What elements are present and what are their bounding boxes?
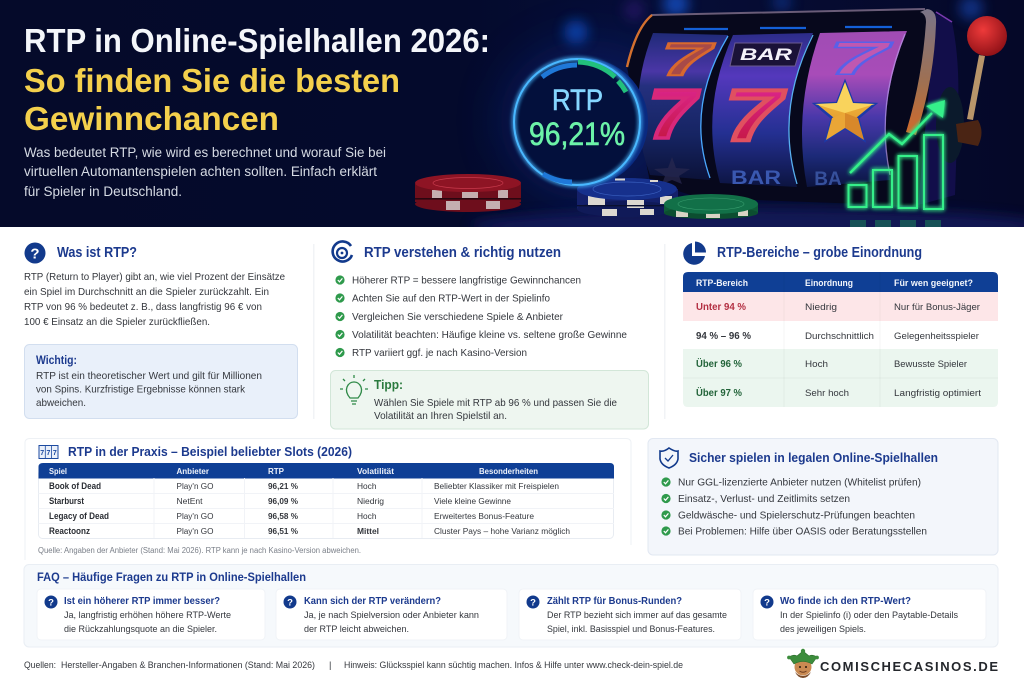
table: rtp ranges <box>683 272 998 407</box>
machine frame top and left edge <box>627 9 925 67</box>
panel: rtp verstehen <box>330 241 648 429</box>
hero background <box>0 0 1024 227</box>
panel background <box>24 564 998 647</box>
symbol: red seven left reel: 7 <box>648 75 700 153</box>
faq card 4: In der Spielinfo (i) oder den Paytable-Details <box>780 610 958 621</box>
faq card 3: Der RTP bezieht sich immer auf das gesamte <box>547 610 727 621</box>
row: book of dead <box>49 481 559 491</box>
callout: wichtig: Wichtig: <box>36 355 77 367</box>
reel 3 <box>802 31 907 187</box>
hero banner <box>0 0 1024 244</box>
row: legacy of dead: 96,58 % <box>268 511 298 521</box>
lever ball <box>967 16 1007 56</box>
panel background <box>648 438 998 555</box>
reel separator lights <box>684 27 905 184</box>
faq card 1 <box>37 589 265 640</box>
heading: Was ist RTP? <box>57 245 137 261</box>
lever <box>936 16 1007 163</box>
table header: Spiel <box>49 466 67 476</box>
symbol: bar plate <box>730 43 802 66</box>
faq card 1: Ja, langfristig erhöhen höhere RTP-Werte <box>64 610 231 621</box>
chart reflection <box>850 220 941 227</box>
hero title: RTP in Online-Spielhallen 2026: <box>24 22 490 59</box>
row: book of dead: Book of Dead <box>49 481 101 491</box>
faq card 3: Spiel, inkl. Basisspiel und Bonus-Features. <box>547 624 715 635</box>
callout: wichtig: von Spins. Kurzfristige Ergebnisse können stark <box>36 384 246 396</box>
symbol: star <box>815 82 875 140</box>
symbol: dim orange seven: 7 <box>661 33 716 85</box>
row: ueber 96: Bewusste Spieler <box>894 359 967 370</box>
icon: target <box>333 241 352 261</box>
faq card 2: Ja, je nach Spielversion oder Anbieter kann <box>304 610 479 621</box>
callout: wichtig <box>24 344 298 418</box>
faq card 4: ? <box>764 598 770 608</box>
symbol: dim bar: BAR <box>731 168 781 189</box>
row: legacy of dead: Hoch <box>357 511 377 521</box>
row: 94 bis 96: 94 % – 96 % <box>696 331 751 342</box>
table header: Volatilität <box>357 466 394 476</box>
row: book of dead: 96,21 % <box>268 481 298 491</box>
footer sources and notice <box>24 660 683 670</box>
faq card 3: ? <box>530 598 536 608</box>
faq card 2 <box>276 589 507 640</box>
row: ueber 97 <box>696 386 981 399</box>
table header <box>38 463 614 478</box>
hero title <box>25 28 487 130</box>
panel background <box>25 438 631 560</box>
row: reactoonz: Cluster Pays – hohe Varianz möglich <box>434 526 570 536</box>
row: book of dead: Play'n GO <box>176 481 214 491</box>
row: legacy of dead: Erweitertes Bonus-Feature <box>434 511 534 521</box>
panel: sicher spielen <box>648 438 998 555</box>
row: ueber 97: Über 97 % <box>696 386 742 399</box>
icon: question mark: ? <box>30 246 40 262</box>
chip stack red <box>415 174 521 212</box>
hero subtitle: Was bedeutet RTP, wie wird es berechnet und worauf Sie bei <box>24 145 386 160</box>
row: unter 94: Unter 94 % <box>696 302 746 313</box>
row: starburst: Viele kleine Gewinne <box>434 496 511 506</box>
body text <box>24 271 285 328</box>
chip stack green <box>664 194 758 219</box>
heading: RTP verstehen & richtig nutzen <box>364 245 561 261</box>
row: unter 94: Nur für Bonus-Jäger <box>894 302 980 313</box>
hero title: So finden Sie die besten <box>24 62 400 99</box>
heading: RTP-Bereiche – grobe Einordnung <box>717 245 922 261</box>
row: starburst: 96,09 % <box>268 496 298 506</box>
checklist <box>335 274 627 359</box>
body text: RTP von 96 % bedeutet z. B., dass langfristig 96 € von <box>24 301 262 313</box>
icon: pie chart <box>683 242 706 265</box>
icon: slot reels: 7 <box>47 450 51 457</box>
row: reactoonz: 96,51 % <box>268 526 298 536</box>
row: unter 94: Niedrig <box>805 302 837 313</box>
item 5: RTP variiert ggf. je nach Kasino-Version <box>352 347 527 359</box>
faq card 4 <box>753 589 986 640</box>
row: 94 bis 96: Durchschnittlich <box>805 331 874 342</box>
row: ueber 96: Hoch <box>805 359 828 370</box>
item 1: Höherer RTP = bessere langfristige Gewinnchancen <box>352 274 581 286</box>
body text: ein Spiel im Durchschnitt an die Spieler zurückzahlt. Ein <box>24 286 269 298</box>
symbol: dim star <box>654 157 690 184</box>
gauge label: RTP <box>552 84 603 117</box>
item 2: Achten Sie auf den RTP-Wert in der Spielinfo <box>352 292 550 304</box>
row: ueber 97: Langfristig optimiert <box>894 388 981 399</box>
row: ueber 97: Sehr hoch <box>805 388 849 399</box>
hero title: Gewinnchancen <box>24 100 279 137</box>
row: 94 bis 96 <box>696 331 979 342</box>
panel: was ist rtp <box>24 242 298 418</box>
logo <box>787 649 998 678</box>
table header <box>683 272 998 292</box>
reel 2 <box>712 33 813 187</box>
callout: wichtig: abweichen. <box>36 397 86 409</box>
body text: RTP (Return to Player) gibt an, wie viel Prozent der Einsätze <box>24 271 285 283</box>
callout: tipp <box>330 370 648 429</box>
background bokeh lights <box>500 0 983 200</box>
table header: Einordnung <box>805 278 853 289</box>
machine side body <box>900 13 958 207</box>
symbol: outlined seven right reel: 7 <box>828 32 894 84</box>
icon: slot reels: 7 <box>53 450 57 457</box>
heading: FAQ – Häufige Fragen zu RTP in Online-Spielhallen <box>37 570 306 584</box>
hero subtitle: für Spieler in Deutschland. <box>24 184 182 199</box>
source note: Quelle: Angaben der Anbieter (Stand: Mai 2026). RTP kann je nach Kasino-Version abweichen. <box>38 546 361 555</box>
footer sources and notice: | <box>329 660 331 670</box>
faq card 1: Ist ein höherer RTP immer besser? <box>64 596 220 607</box>
machine body <box>627 9 935 206</box>
faq card 2: der RTP leicht abweichen. <box>304 624 409 635</box>
gauge disc <box>582 58 648 184</box>
table surface <box>471 204 1024 227</box>
icon: jester <box>787 649 819 678</box>
panel: rtp in der praxis <box>25 438 631 560</box>
heading: RTP in der Praxis – Beispiel beliebter Slots (2026) <box>68 444 352 459</box>
row: unter 94 <box>696 302 980 313</box>
table rows background <box>683 292 998 407</box>
hero subtitle <box>24 145 386 199</box>
machine frame right bar <box>906 9 936 135</box>
row: legacy of dead: Legacy of Dead <box>49 511 109 521</box>
table header: RTP <box>268 466 284 476</box>
row: reactoonz: Play'n GO <box>176 526 214 536</box>
gauge arcs <box>542 65 577 77</box>
footer sources and notice: Hinweis: Glücksspiel kann süchtig machen. Infos & Hilfe unter www.check-dein-spiel.de <box>344 660 683 670</box>
symbol: bar plate: BAR <box>740 45 793 64</box>
faq card 1: die Rückzahlungsquote an die Spieler. <box>64 624 217 635</box>
row: legacy of dead: Play'n GO <box>176 511 214 521</box>
faq card 2: Kann sich der RTP verändern? <box>304 596 441 607</box>
callout: tipp: Tipp: <box>374 378 403 392</box>
lever hub <box>956 120 982 146</box>
faq card 3 <box>519 589 741 640</box>
faq card 1: ? <box>48 598 54 608</box>
checklist <box>661 476 927 538</box>
item 3: Vergleichen Sie verschiedene Spiele & Anbieter <box>352 311 563 323</box>
rtp gauge <box>514 58 648 186</box>
item 4: Volatilität beachten: Häufige kleine vs. seltene große Gewinne <box>352 329 627 341</box>
panel: rtp bereiche <box>683 242 998 407</box>
table header: RTP-Bereich <box>696 278 748 289</box>
faq card 3: Zählt RTP für Bonus-Runden? <box>547 596 682 607</box>
faq card 4: Wo finde ich den RTP-Wert? <box>780 596 911 607</box>
growth chart neon icon <box>848 100 945 209</box>
row: legacy of dead <box>49 511 534 521</box>
item 4: Bei Problemen: Hilfe über OASIS oder Beratungsstellen <box>678 526 927 538</box>
reel 1 <box>638 33 728 180</box>
table header: Anbieter <box>176 466 210 476</box>
lever rod <box>967 55 985 120</box>
icon: slot reels <box>39 446 58 458</box>
gauge value: 96,21% <box>529 116 625 152</box>
item 3: Geldwäsche- und Spielerschutz-Prüfungen beachten <box>678 510 915 522</box>
chip stack blue <box>577 178 678 217</box>
row: reactoonz: Mittel <box>357 526 379 536</box>
faq card 2: ? <box>287 598 293 608</box>
table: slots <box>38 463 614 538</box>
symbol: red seven middle reel: 7 <box>725 76 785 156</box>
icon: light bulb <box>340 375 368 404</box>
callout: wichtig: RTP ist ein theoretischer Wert und gilt für Millionen <box>36 370 262 382</box>
logo wordmark: COMISCHECASINOS.DE <box>820 659 998 674</box>
table body <box>38 470 614 538</box>
lever hub back <box>936 87 964 163</box>
table header: Für wen geeignet? <box>894 278 973 289</box>
slot machine illustration <box>627 9 958 210</box>
row: 94 bis 96: Gelegenheitsspieler <box>894 331 979 342</box>
row: starburst: Starburst <box>49 496 84 506</box>
footer sources and notice: Quellen: <box>24 660 56 670</box>
row: reactoonz <box>49 526 570 536</box>
row: starburst: Niedrig <box>357 496 384 506</box>
row: ueber 96: Über 96 % <box>696 357 742 370</box>
table header: Besonderheiten <box>479 466 538 476</box>
row: book of dead: Hoch <box>357 481 377 491</box>
callout: tipp: Wählen Sie Spiele mit RTP ab 96 % und passen Sie die <box>374 397 617 409</box>
footer sources and notice: Hersteller-Angaben & Branchen-Informationen (Stand: Mai 2026) <box>61 660 315 670</box>
faq card 4: des jeweiligen Spiels. <box>780 624 866 635</box>
panel: faq <box>24 564 998 647</box>
item 2: Einsatz-, Verlust- und Zeitlimits setzen <box>678 493 850 505</box>
item 1: Nur GGL-lizenzierte Anbieter nutzen (Whitelist prüfen) <box>678 476 921 488</box>
heading: Sicher spielen in legalen Online-Spielhallen <box>689 451 938 465</box>
hero subtitle: virtuellen Automantenspielen achten sollten. Einfach erklärt <box>24 164 377 179</box>
row: reactoonz: Reactoonz <box>49 526 91 536</box>
icon: shield <box>660 448 678 468</box>
row: starburst <box>49 496 511 506</box>
icon: slot reels: 7 <box>40 450 44 457</box>
body text: 100 € Einsatz an die Spieler zurückfließen. <box>24 316 210 328</box>
row: book of dead: Beliebter Klassiker mit Freispielen <box>434 481 559 491</box>
symbol: dim bar right: BA <box>814 169 842 190</box>
callout: tipp: Volatilität an Ihren Spielstil an. <box>374 410 507 422</box>
row: starburst: NetEnt <box>176 496 203 506</box>
icon: question mark <box>24 242 46 264</box>
row: ueber 96 <box>696 357 967 370</box>
